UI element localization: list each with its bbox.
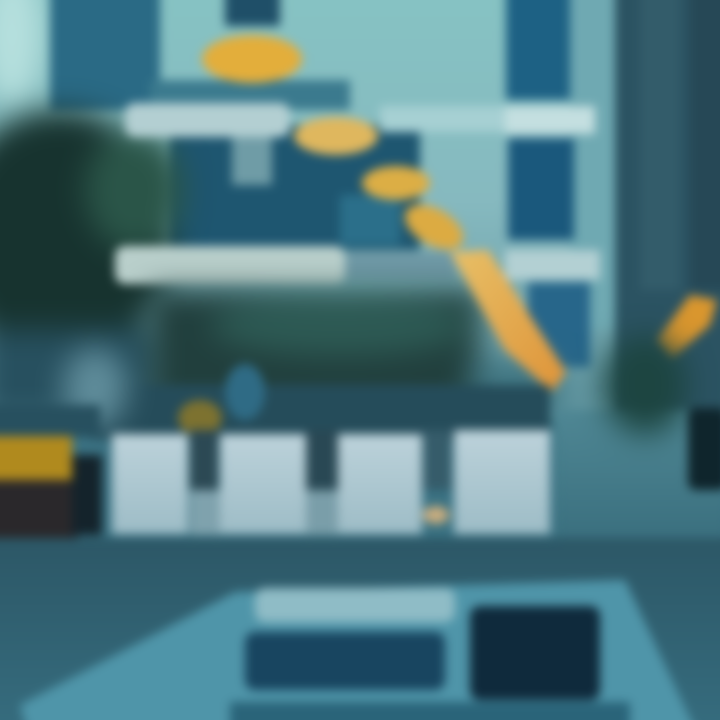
white band upper — [125, 103, 595, 137]
right orange light — [657, 295, 717, 358]
light 1 — [202, 35, 302, 83]
bottom strip — [230, 702, 630, 720]
light plane — [20, 580, 700, 720]
background buildings — [50, 0, 420, 250]
pedestrian row — [63, 348, 550, 490]
white band lower — [115, 246, 600, 284]
pale highlight — [255, 588, 455, 622]
right building — [615, 0, 720, 410]
blue tower — [506, 0, 615, 367]
light 2 — [294, 117, 378, 155]
dark box right — [470, 606, 600, 700]
white blocks — [112, 430, 550, 535]
left tree — [0, 110, 185, 420]
light 4 — [397, 195, 471, 259]
central tree — [150, 290, 560, 420]
sky — [0, 0, 720, 420]
left yellow awning and dark base — [0, 405, 102, 544]
right lower foliage — [555, 335, 720, 540]
golden arc of lights — [202, 35, 566, 392]
light trail — [450, 250, 566, 392]
light 3 — [362, 166, 430, 200]
dark box left — [245, 632, 445, 690]
ground — [0, 538, 720, 720]
